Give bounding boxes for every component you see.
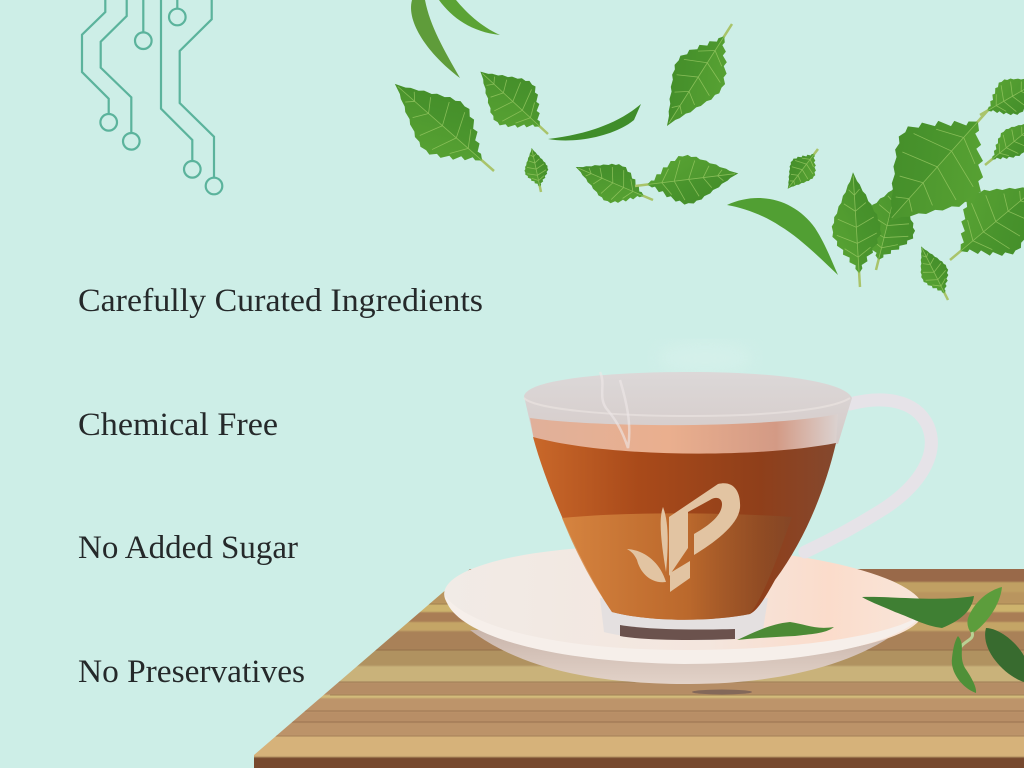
faint steam bbox=[657, 342, 753, 374]
mint sprig bbox=[862, 587, 1024, 693]
leaf: behind large bbox=[848, 178, 925, 277]
leaf: narrow centre bbox=[548, 104, 641, 140]
text: curated ingredients: Carefully Curated Ingredients bbox=[78, 283, 483, 319]
leaf: upper centre bbox=[645, 10, 754, 140]
tea in cup bbox=[533, 437, 836, 620]
tea cup and saucer bbox=[442, 372, 931, 684]
leaf: pair upper dark bbox=[632, 149, 741, 210]
logo: upper leaf bbox=[661, 507, 668, 572]
wood grain bbox=[254, 604, 1024, 736]
leaf: narrow top bbox=[439, 0, 500, 35]
steam wisp bbox=[600, 372, 629, 448]
logo: lower stroke bbox=[670, 561, 690, 592]
leaf: top right edge bbox=[971, 63, 1024, 131]
wooden table bbox=[240, 560, 1024, 768]
text: no preservatives: No Preservatives bbox=[78, 654, 305, 690]
leaf: lower right edge bbox=[927, 158, 1024, 288]
foot reflection bbox=[620, 625, 735, 640]
sprig leaf left bbox=[862, 596, 974, 628]
sprig stem bbox=[960, 632, 973, 648]
leaf: bottom small bbox=[909, 240, 960, 306]
cup upper glass bbox=[524, 372, 852, 444]
text: no added sugar: No Added Sugar bbox=[78, 530, 298, 566]
saucer leaf bbox=[737, 622, 834, 640]
sprig leaf bottom bbox=[952, 636, 976, 693]
leaf: narrow top left bbox=[411, 0, 460, 78]
leaf: tall bbox=[829, 171, 884, 288]
falling mint leaves bbox=[375, 0, 1024, 306]
leaf: small dark bbox=[777, 141, 829, 197]
cup handle bbox=[805, 400, 931, 552]
cup inner rim band bbox=[530, 414, 838, 456]
logo on cup bbox=[627, 483, 740, 592]
leaf: large left bbox=[375, 61, 514, 194]
sprig leaf right bbox=[985, 628, 1024, 682]
saucer underside bbox=[470, 630, 900, 684]
cup foot bbox=[600, 598, 768, 640]
wood knot bbox=[692, 690, 752, 694]
leaf: curved bbox=[727, 198, 838, 275]
saucer bbox=[442, 538, 926, 666]
text: chemical free: Chemical Free bbox=[78, 407, 278, 443]
tea lower reflection bbox=[562, 513, 792, 620]
leaf: small centre bbox=[520, 146, 553, 194]
benefit list bbox=[78, 283, 483, 690]
circuit line decoration bbox=[82, 0, 222, 194]
saucer rim bbox=[445, 596, 924, 664]
sprig leaf top bbox=[967, 587, 1002, 634]
leaf: mid right edge bbox=[976, 108, 1024, 176]
leaf: large right bbox=[852, 75, 1024, 254]
cup rim highlight bbox=[524, 398, 850, 416]
logo: lower leaf bbox=[627, 549, 666, 582]
leaf: pair lower bbox=[568, 149, 661, 218]
leaf: second bbox=[462, 52, 566, 153]
logo: P letterform bbox=[669, 483, 740, 576]
